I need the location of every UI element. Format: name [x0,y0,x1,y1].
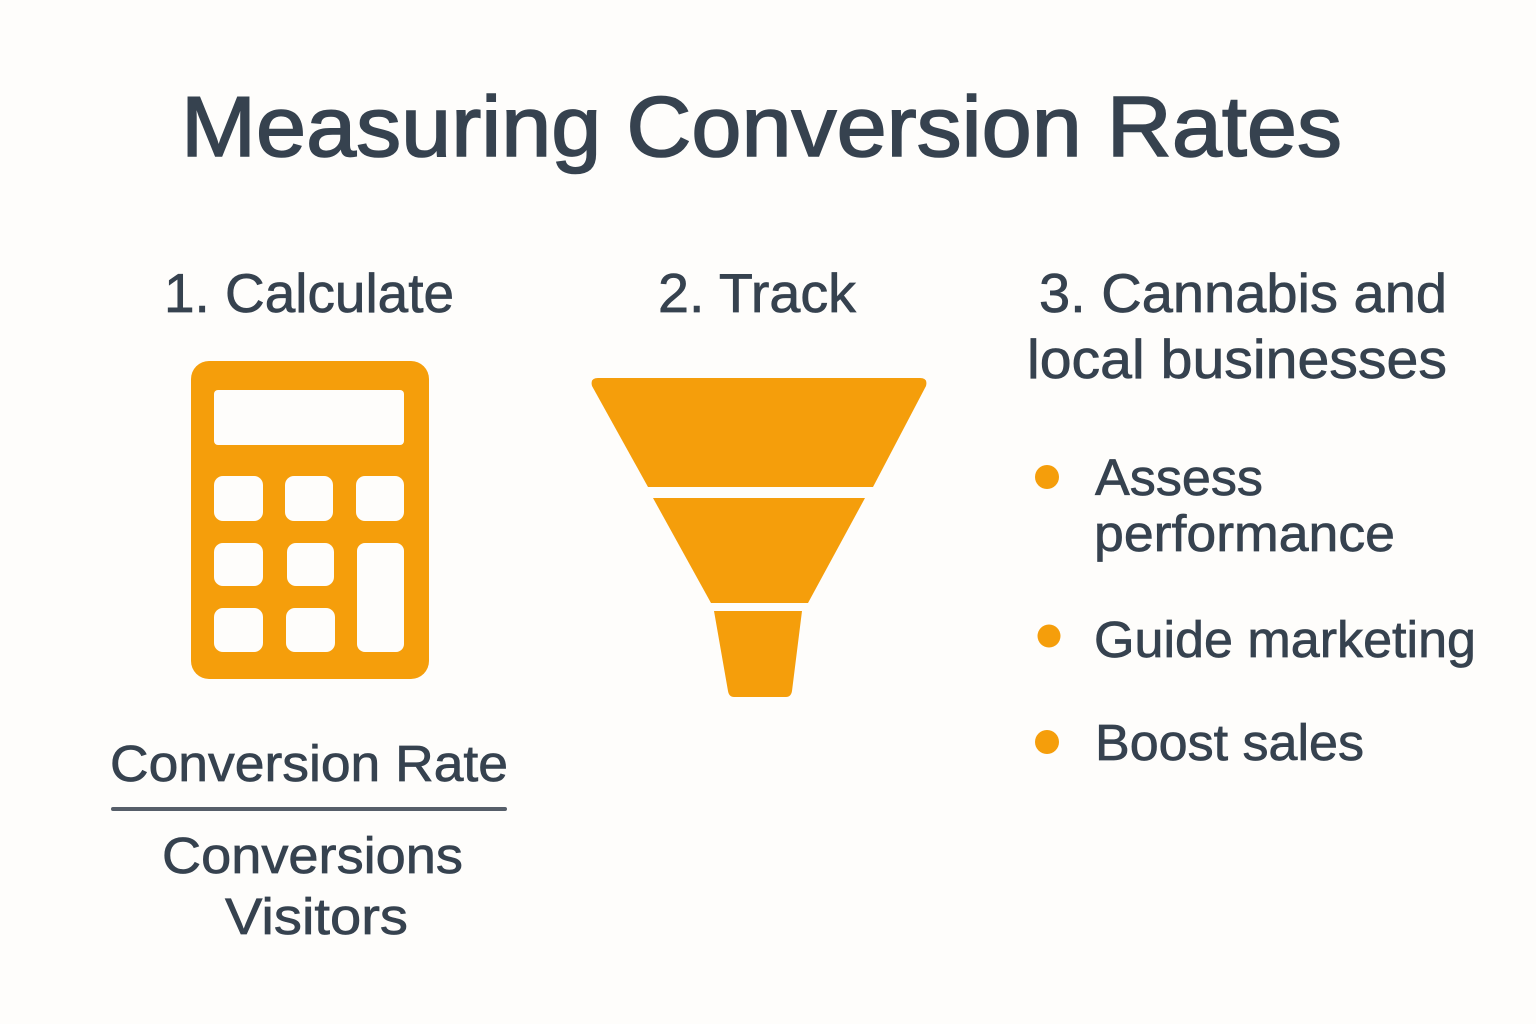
bullet: assess performance [1035,449,1395,562]
bullet: assess performance: performance [1094,505,1395,562]
panel: cannabis and local businesses [1027,262,1476,771]
formula denominator: Visitors [225,888,408,945]
formula numerator: Conversions [162,827,463,884]
formula: conversion rate [110,735,508,945]
heading: 3. Cannabis and local businesses: local businesses [1027,328,1447,390]
title: Measuring Conversion Rates [181,80,1342,175]
bullet: boost sales: Boost sales [1095,714,1364,771]
formula line [111,807,507,811]
bullet: assess performance: Assess [1095,449,1263,506]
panel: track [592,262,926,697]
icon: calculator [191,361,429,679]
heading: 3. Cannabis and local businesses: 3. Cannabis and [1039,262,1447,324]
heading: 2. Track: 2. Track [658,262,856,324]
heading: 1. Calculate: 1. Calculate [164,262,454,324]
icon: funnel [592,378,926,697]
formula label: Conversion Rate [110,735,508,792]
bullet: guide marketing: Guide marketing [1094,611,1476,668]
panel: calculate [110,262,508,945]
heading: 3. Cannabis and local businesses [1027,262,1447,390]
